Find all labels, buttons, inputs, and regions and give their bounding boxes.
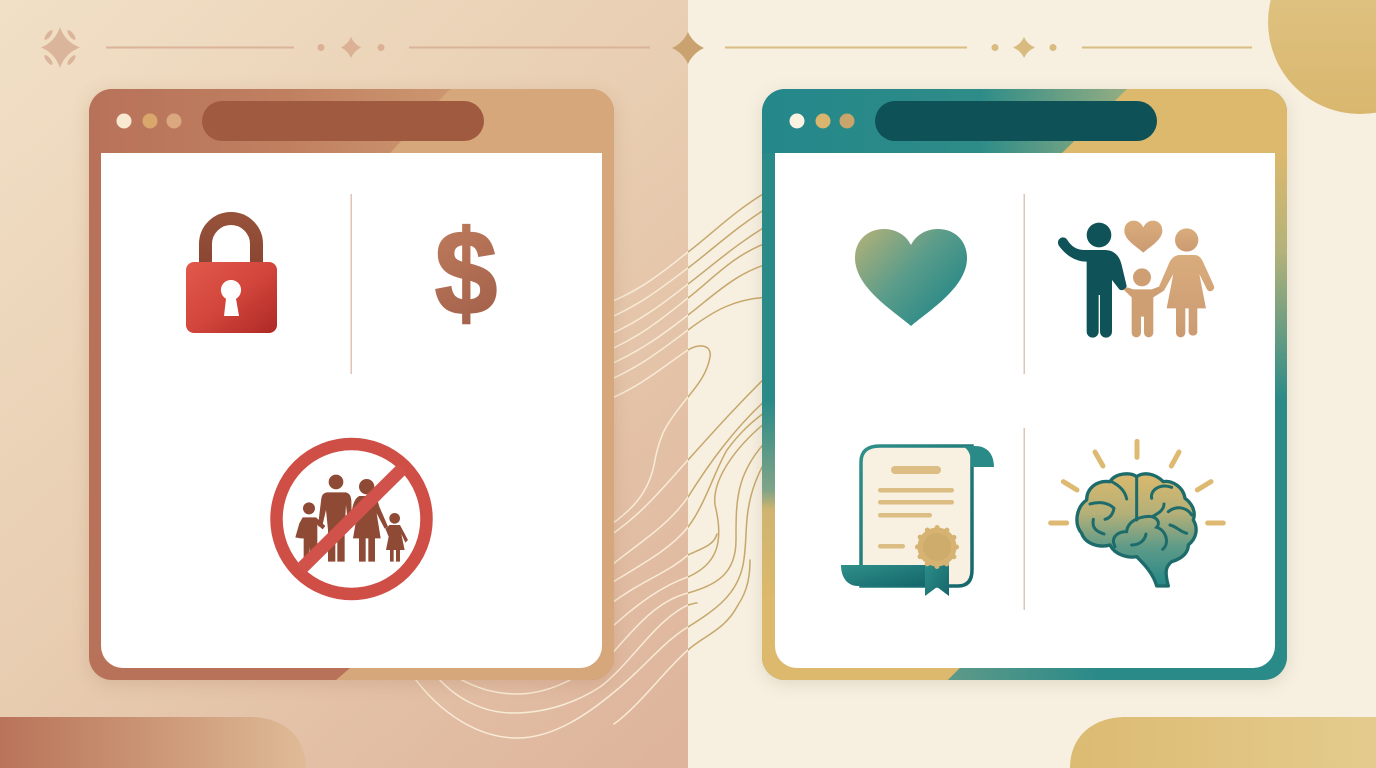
left window frame bbox=[89, 89, 614, 680]
prohibition slash bbox=[301, 468, 403, 569]
right window content area bbox=[775, 153, 1275, 668]
connecting wave lines, right side bbox=[688, 194, 762, 651]
ornament: left rule bbox=[106, 46, 294, 48]
certificate text lines bbox=[878, 466, 954, 548]
icon: heart bbox=[855, 229, 967, 326]
ornament: dots and small star bbox=[318, 37, 384, 58]
right window frame bbox=[762, 89, 1287, 680]
icon: padlock bbox=[186, 218, 277, 333]
heart between parents bbox=[1124, 221, 1162, 253]
top ornament row, left bbox=[41, 27, 650, 68]
left window shadow bbox=[89, 93, 614, 684]
ornament: dots and small star right panel bbox=[992, 37, 1056, 58]
address bar bbox=[202, 101, 484, 141]
divider bbox=[350, 194, 352, 374]
father bbox=[1058, 223, 1127, 338]
mother bbox=[1159, 228, 1214, 337]
ribbon bbox=[925, 560, 949, 596]
upper divider bbox=[1024, 194, 1025, 374]
panel: right browser window bbox=[762, 89, 1287, 684]
brain body bbox=[1077, 474, 1196, 586]
ornament: corner flourish bbox=[41, 27, 80, 68]
family figures bbox=[295, 475, 408, 562]
window dots bbox=[116, 114, 182, 128]
scroll curl fill bbox=[962, 446, 994, 467]
panel: left browser window bbox=[89, 89, 614, 684]
right background panel bbox=[688, 0, 1376, 768]
right window shadow bbox=[762, 93, 1287, 684]
brain rays bbox=[1051, 441, 1223, 523]
window dots bbox=[790, 114, 854, 128]
icon: brain with rays bbox=[1051, 441, 1223, 586]
brain folds bbox=[1090, 477, 1192, 549]
left window content area bbox=[101, 153, 602, 668]
address bar bbox=[875, 101, 1157, 141]
decorative bottom-left shape bbox=[0, 717, 306, 768]
connecting wave lines, left side bbox=[415, 251, 688, 739]
lower divider bbox=[1024, 428, 1025, 610]
ornament: right rule bbox=[409, 46, 650, 48]
decorative bottom-right shape bbox=[1070, 717, 1376, 768]
ornament: right rule right panel bbox=[1082, 46, 1252, 48]
prohibition ring bbox=[276, 444, 426, 594]
ornament: centre star bbox=[672, 32, 704, 64]
icon: certificate scroll with seal bbox=[841, 446, 994, 596]
scroll bottom roll bbox=[841, 565, 925, 586]
icon: family with heart bbox=[1058, 221, 1214, 338]
icon: dollar sign: $ bbox=[435, 205, 497, 340]
ornament: left rule right panel bbox=[725, 46, 967, 48]
top ornament row, right bbox=[725, 37, 1252, 58]
child bbox=[1123, 268, 1164, 337]
scroll page bbox=[861, 446, 972, 586]
decorative gold circle, top right bbox=[1268, 0, 1376, 114]
seal bbox=[918, 528, 956, 566]
left background panel bbox=[0, 0, 688, 768]
icon: no family prohibition sign bbox=[276, 444, 426, 594]
